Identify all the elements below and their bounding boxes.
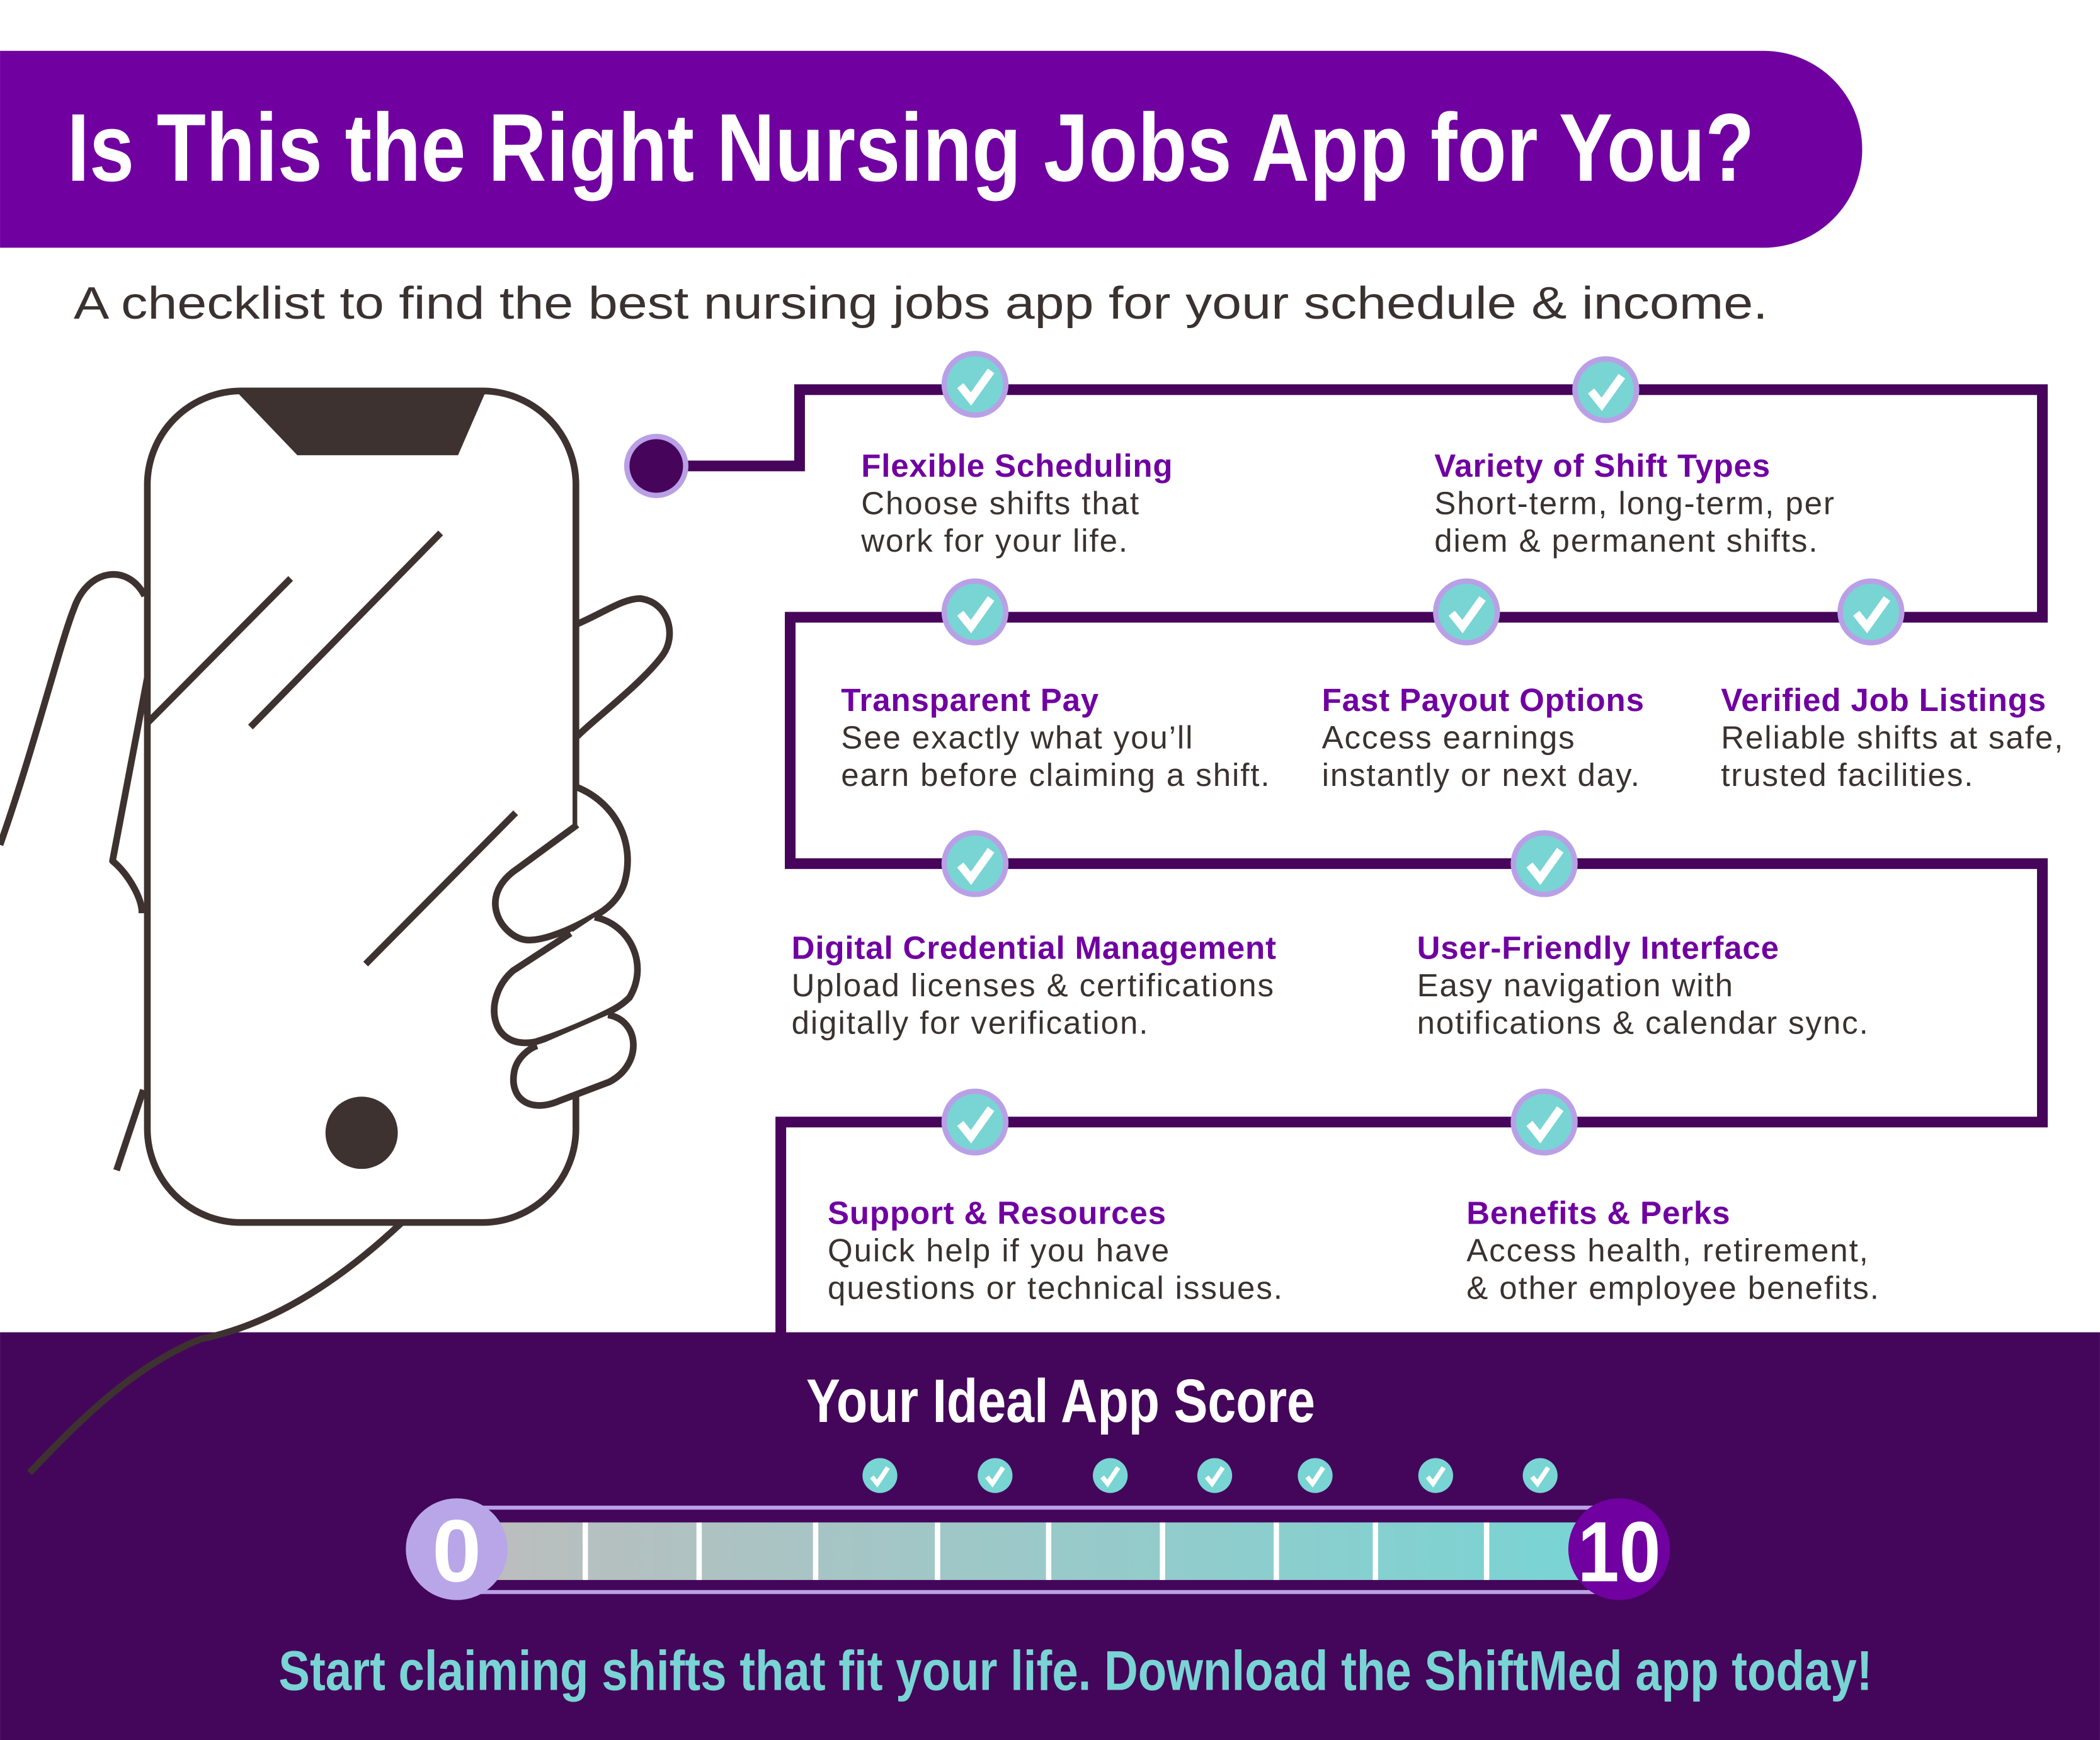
item: User-Friendly Interface: notifications & calendar sync. (1417, 1004, 1869, 1040)
item: Fast Payout Options: Access earnings (1322, 720, 1576, 756)
item: Flexible Scheduling: Flexible Scheduling (861, 448, 1173, 484)
score bar: 0 (432, 1501, 481, 1600)
item: Verified Job Listings: Reliable shifts at safe, (1721, 720, 2064, 756)
item: User-Friendly Interface: User-Friendly Interface (1417, 930, 1779, 965)
score bar: 10 (1578, 1504, 1661, 1600)
score heading: Your Ideal App Score (806, 1366, 1315, 1435)
item: User-Friendly Interface: Easy navigation with (1417, 967, 1734, 1003)
item: Flexible Scheduling: work for your life. (860, 523, 1129, 559)
item: Benefits & Perks: & other employee benefits. (1466, 1270, 1880, 1305)
item: Transparent Pay: Transparent Pay (841, 682, 1099, 718)
item: User-Friendly Interface (1417, 930, 1869, 1040)
item: Benefits & Perks: Access health, retirement, (1466, 1232, 1869, 1268)
item: Transparent Pay (841, 682, 1271, 793)
phone notch (239, 394, 485, 455)
item: Benefits & Perks (1466, 1195, 1880, 1305)
item: Verified Job Listings: Verified Job Listings (1721, 682, 2046, 718)
check icons (944, 353, 1902, 1153)
item: Verified Job Listings: trusted facilities. (1721, 757, 1974, 793)
checklist path (627, 390, 2043, 1339)
item: Verified Job Listings (1721, 682, 2064, 793)
item: Support & Resources: questions or technical issues. (828, 1270, 1284, 1305)
item: Transparent Pay: See exactly what you’ll (841, 720, 1194, 756)
bottom band (0, 1333, 2100, 1740)
item: Variety of Shift Types: Short-term, long-term, per (1434, 485, 1835, 521)
item: Support & Resources (828, 1195, 1284, 1305)
score check icons (862, 1458, 1558, 1493)
item: Fast Payout Options (1322, 682, 1645, 793)
item: Digital Credential Management: Upload licenses & certifications (792, 967, 1275, 1003)
item: Variety of Shift Types: Variety of Shift Types (1434, 448, 1771, 484)
item: Transparent Pay: earn before claiming a shift. (841, 757, 1271, 793)
item: Flexible Scheduling (860, 448, 1173, 559)
score bar (406, 1498, 1670, 1600)
item: Digital Credential Management (792, 930, 1277, 1040)
item: Support & Resources: Quick help if you have (828, 1232, 1170, 1268)
illustration: hand holding phone (0, 391, 670, 1473)
item: Flexible Scheduling: Choose shifts that (861, 485, 1140, 521)
phone home button (326, 1096, 398, 1169)
item: Support & Resources: Support & Resources (828, 1195, 1167, 1231)
item: Digital Credential Management: digitally for verification. (792, 1004, 1149, 1040)
item: Fast Payout Options: instantly or next day. (1322, 757, 1641, 793)
item: Fast Payout Options: Fast Payout Options (1322, 682, 1645, 718)
title banner: Is This the Right Nursing Jobs App for You? (67, 94, 1754, 202)
item: Digital Credential Management: Digital Credential Management (792, 930, 1277, 965)
title banner (0, 51, 1862, 247)
item: Variety of Shift Types: diem & permanent shifts. (1434, 523, 1818, 559)
subtitle: A checklist to find the best nursing jobs app for your schedule & income. (74, 278, 1768, 329)
item: Benefits & Perks: Benefits & Perks (1466, 1195, 1730, 1231)
item: Variety of Shift Types (1434, 448, 1835, 559)
